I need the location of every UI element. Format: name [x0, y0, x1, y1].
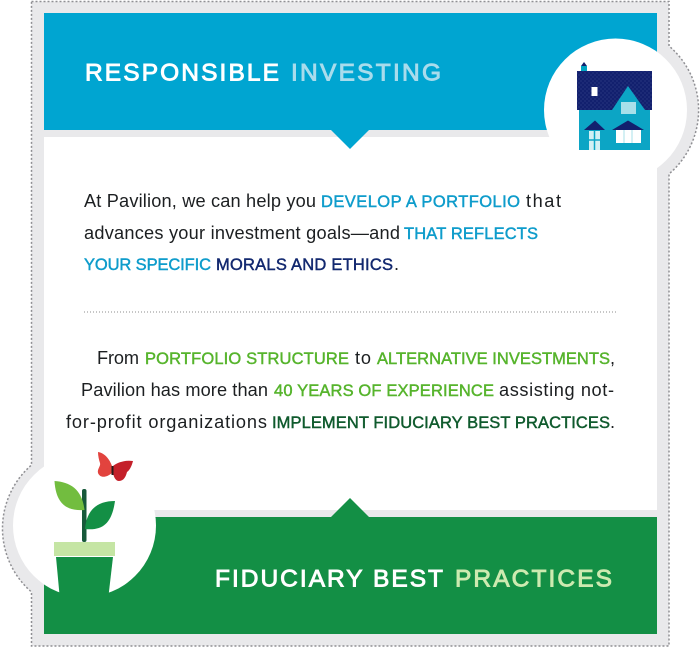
icon: butterfly — [98, 452, 133, 481]
panel: top banner — [44, 13, 657, 149]
text block: experience statement: 40 YEARS OF EXPERIENCE — [274, 382, 494, 400]
text block: portfolio introduction: DEVELOP A PORTFOLIO — [321, 193, 520, 211]
text block: portfolio introduction: THAT REFLECTS — [404, 225, 538, 243]
heading: fiduciary best practices — [215, 566, 612, 592]
text block: experience statement: From — [97, 348, 139, 368]
text block: portfolio introduction: advances your investment goals—and — [84, 223, 400, 243]
heading: responsible investing: INVESTING — [291, 60, 441, 86]
heading: fiduciary best practices: FIDUCIARY BEST — [215, 566, 443, 592]
text block: experience statement: . — [610, 412, 615, 432]
text block: experience statement: to — [355, 348, 371, 368]
text block: experience statement: IMPLEMENT FIDUCIARY BEST PRACTICES — [272, 414, 610, 432]
text block: experience statement — [66, 348, 615, 432]
text block: portfolio introduction: YOUR SPECIFIC — [84, 256, 211, 274]
text block: portfolio introduction: MORALS AND ETHICS — [216, 256, 393, 274]
circle: plant backdrop — [13, 454, 156, 597]
text block: portfolio introduction: At Pavilion, we can help you — [84, 191, 316, 211]
text block: portfolio introduction — [84, 191, 561, 274]
text block: experience statement: for-profit organizations — [66, 412, 267, 432]
icon: potted plant — [54, 481, 115, 600]
text block: experience statement: PORTFOLIO STRUCTURE — [145, 350, 349, 368]
text block: experience statement: , — [610, 348, 615, 368]
circle: house backdrop — [544, 38, 687, 182]
text block: portfolio introduction: that — [526, 191, 561, 211]
text block: experience statement: ALTERNATIVE INVESTMENTS — [377, 350, 610, 368]
icon: house — [577, 62, 652, 150]
text block: experience statement: Pavilion has more than — [81, 380, 268, 400]
heading: responsible investing — [85, 60, 441, 86]
text block: experience statement: assisting not- — [499, 380, 614, 400]
text block: portfolio introduction: . — [394, 254, 399, 274]
panel: bottom banner — [44, 498, 657, 634]
heading: fiduciary best practices: PRACTICES — [455, 566, 612, 592]
heading: responsible investing: RESPONSIBLE — [85, 60, 279, 86]
